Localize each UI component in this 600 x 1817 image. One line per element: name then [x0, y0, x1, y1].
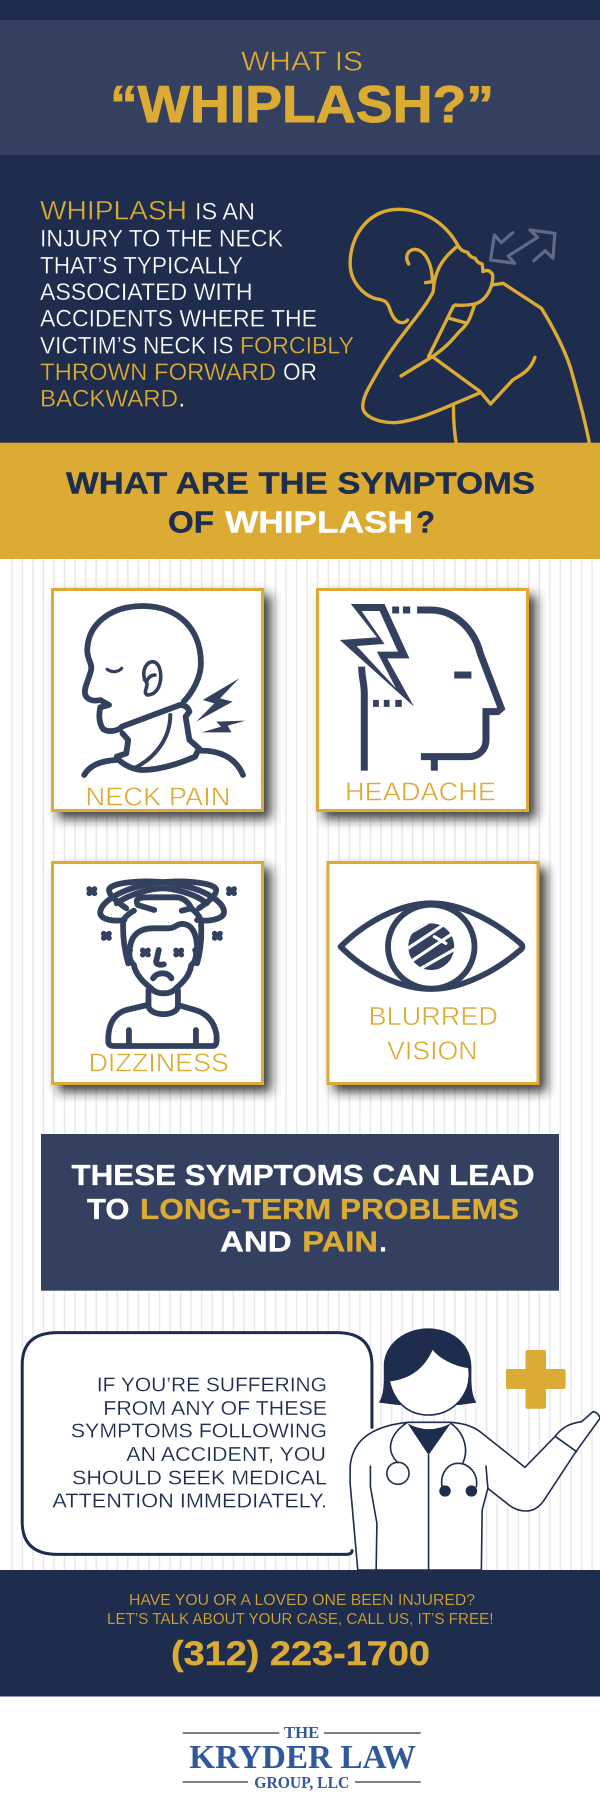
definition text: IS AN	[195, 198, 255, 226]
panel: long-term problems callout	[41, 1134, 559, 1291]
definition text	[40, 196, 354, 413]
label: blurred vision	[368, 1001, 498, 1065]
bubble text: IF YOU’RE SUFFERING	[97, 1375, 327, 1397]
panel: long-term problems callout: THESE SYMPTOMS CAN LEAD	[72, 1160, 534, 1192]
definition text: ASSOCIATED WITH	[40, 279, 253, 306]
heading: whiplash: “WHIPLASH?”	[110, 76, 494, 134]
panel: call to action: LET’S TALK ABOUT YOUR CASE, CALL US, IT’S FREE!	[107, 1611, 494, 1628]
panel: call to action	[0, 1570, 600, 1697]
speech bubble	[22, 1333, 372, 1554]
definition text: THROWN FORWARD	[40, 359, 276, 386]
panel: definition	[0, 155, 600, 443]
definition text: FORCIBLY	[240, 332, 354, 359]
definition text: THAT’S TYPICALLY	[40, 252, 243, 279]
label: dizziness: DIZZINESS	[88, 1048, 229, 1078]
bubble text: SHOULD SEEK MEDICAL	[72, 1467, 327, 1489]
icon: dizziness	[89, 881, 234, 1046]
panel: symptoms heading: WHIPLASH	[225, 505, 413, 540]
heading: what is: WHAT IS	[241, 46, 363, 77]
panel: symptoms heading: ?	[416, 505, 435, 540]
definition text: BACKWARD	[40, 386, 178, 413]
label: blurred vision: VISION	[387, 1035, 478, 1065]
panel: long-term problems callout: LONG-TERM PROBLEMS	[140, 1194, 519, 1226]
panel: long-term problems callout: PAIN	[302, 1227, 378, 1259]
icon: person holding neck	[350, 209, 589, 443]
logo: The Kryder Law Group: GROUP, LLC	[254, 1773, 349, 1792]
phone number: (312) 223-1700	[171, 1635, 430, 1673]
bubble text: SYMPTOMS FOLLOWING	[71, 1421, 327, 1443]
icon: eye	[341, 903, 522, 989]
bubble text	[52, 1375, 327, 1513]
panel: long-term problems callout: .	[379, 1227, 387, 1259]
panel: long-term problems callout: TO	[87, 1194, 129, 1226]
logo: The Kryder Law Group	[183, 1723, 421, 1792]
definition text: WHIPLASH	[40, 196, 187, 226]
bubble text: ATTENTION IMMEDIATELY.	[52, 1491, 327, 1513]
definition text: OR	[283, 359, 317, 386]
logo: The Kryder Law Group: KRYDER LAW	[189, 1739, 416, 1776]
panel: call to action: HAVE YOU OR A LOVED ONE BEEN INJURED?	[129, 1592, 475, 1609]
label: blurred vision: BLURRED	[368, 1001, 498, 1031]
label: neck pain: NECK PAIN	[86, 782, 230, 812]
definition text: VICTIM’S NECK IS	[40, 332, 234, 359]
card: dizziness	[52, 862, 262, 1084]
card: neck pain	[52, 590, 262, 812]
definition text: ACCIDENTS WHERE THE	[40, 306, 317, 333]
illustration: doctor	[350, 1328, 600, 1570]
panel: symptoms heading: WHAT ARE THE SYMPTOMS	[66, 466, 535, 500]
bubble text: FROM ANY OF THESE	[103, 1398, 327, 1420]
label: headache: HEADACHE	[345, 777, 496, 807]
icon: motion arrows	[491, 230, 555, 263]
header band	[0, 0, 600, 155]
panel: symptoms heading	[0, 443, 600, 559]
striped background	[0, 559, 600, 1570]
icon: neck pain	[84, 606, 246, 775]
card: blurred vision	[328, 862, 538, 1084]
icon: medical cross	[506, 1350, 566, 1409]
bubble text: AN ACCIDENT, YOU	[126, 1444, 326, 1466]
logo: The Kryder Law Group: THE	[284, 1723, 319, 1742]
panel: long-term problems callout: AND	[220, 1227, 292, 1259]
icon: headache	[340, 604, 501, 771]
card: headache	[318, 590, 528, 810]
definition text: INJURY TO THE NECK	[40, 226, 283, 253]
definition text: .	[178, 386, 185, 413]
panel: symptoms heading: OF	[168, 505, 214, 540]
